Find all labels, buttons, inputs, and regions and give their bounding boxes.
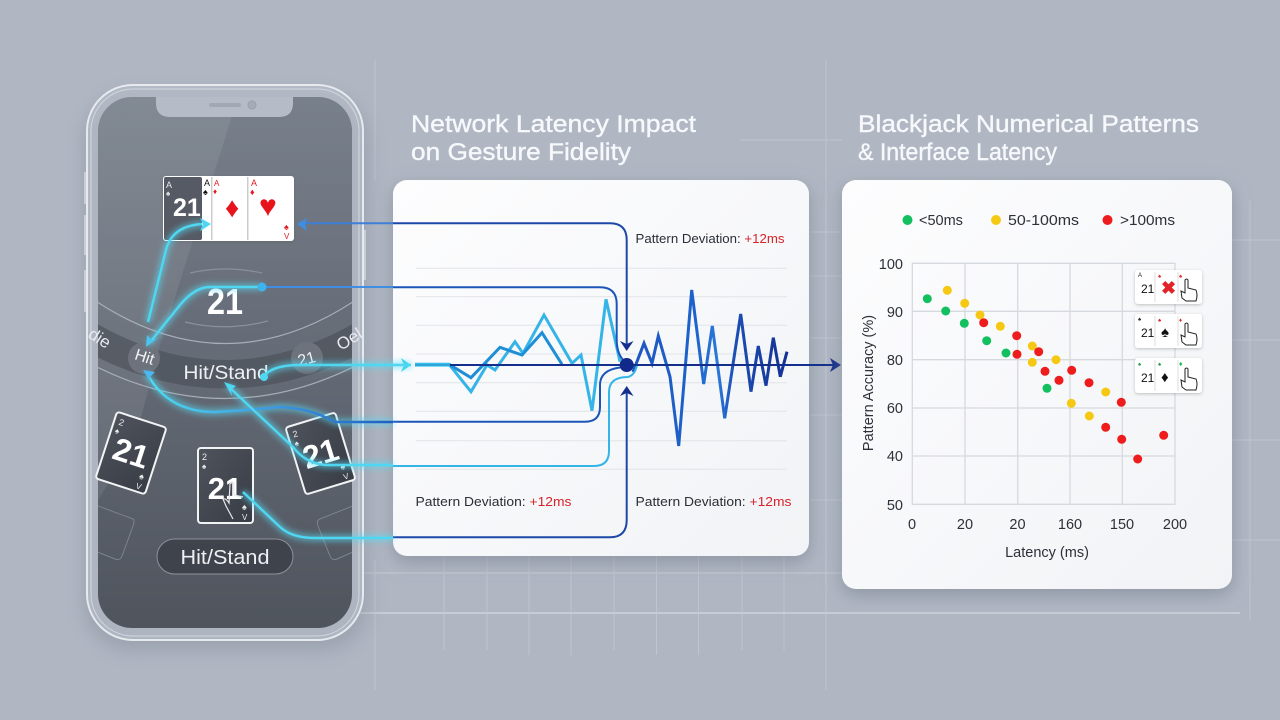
title: network latency impact [411, 111, 696, 166]
right tilted card: V [342, 471, 351, 482]
x axis labels: 150 [1110, 517, 1134, 533]
band label: Oel: Oel [333, 324, 366, 354]
top card fan: ♠ [284, 222, 289, 232]
x axis labels [908, 517, 1187, 533]
center card with hand: V [242, 513, 248, 522]
x axis labels: 0 [908, 517, 916, 533]
21 button: 21 [296, 349, 318, 370]
trace: center card [243, 492, 393, 538]
trace glow [146, 224, 411, 538]
hit button: Hit [132, 347, 157, 369]
trace: hit [149, 377, 393, 422]
y axis labels [879, 257, 903, 514]
connector lines to hub [393, 223, 637, 537]
top card fan: 21 [173, 194, 201, 222]
score dot [258, 282, 266, 292]
points: over 100ms [979, 318, 1168, 464]
top card fan: ♦ [213, 187, 217, 196]
x axis labels: 20 [957, 517, 973, 533]
annotation: left deviation: Pattern Deviation: +12ms [416, 494, 572, 509]
plot grid [912, 263, 1175, 504]
points: 50 to 100ms [943, 286, 1110, 420]
trace: stand [230, 388, 393, 465]
mini card: success gesture: 21 [1141, 371, 1155, 385]
left tilted card: 21 [109, 430, 153, 476]
center card with hand: 2 [202, 452, 207, 462]
mini card: success gesture: ♠ [1138, 362, 1142, 368]
hit/stand pill button [157, 539, 293, 574]
x axis labels: 160 [1058, 517, 1082, 533]
arrowhead: fan [200, 218, 211, 231]
legend: <50ms [919, 213, 963, 229]
trace: card fan [148, 224, 202, 322]
output waveform [633, 290, 787, 446]
top card fan: ♠ [166, 189, 171, 198]
arrowhead: hit upper [146, 335, 158, 347]
center card with hand [198, 448, 253, 523]
top card fan: ♠ [203, 187, 208, 197]
legend: 50-100ms [1008, 213, 1079, 229]
arrowhead: stand dot [260, 373, 268, 381]
arrowhead: blue to card [297, 218, 307, 231]
x axis labels: 20 [1009, 517, 1026, 533]
input waveform [415, 299, 620, 411]
connector: hit/stand [393, 365, 637, 466]
center card with hand: ♠ [242, 502, 247, 512]
arrowhead: down [620, 341, 634, 351]
right tilted card [285, 412, 356, 495]
right tilted card: ♠ [339, 461, 347, 472]
mini card: failed gesture: ♠ [1179, 274, 1183, 280]
hub node [620, 358, 634, 372]
mini card: spade gesture: ♠ [1158, 318, 1162, 324]
title: blackjack numerical patterns [858, 111, 1199, 166]
title: network latency impact: Network Latency Impact [411, 111, 696, 138]
x axis title: Latency (ms) [1005, 545, 1089, 561]
curved control band [98, 302, 352, 400]
trace: hit/stand [266, 365, 411, 374]
points: under 50ms [923, 294, 1052, 393]
left tilted card: 2 [118, 417, 125, 428]
top card fan: ♦ [225, 192, 239, 223]
y axis labels: 100 [879, 257, 903, 273]
hit button [128, 342, 160, 374]
connector: hit [393, 367, 626, 422]
top card fan: A [251, 178, 257, 188]
y axis labels: 80 [887, 353, 903, 369]
top card fan: ♥ [259, 190, 277, 223]
title: blackjack numerical patterns: Blackjack Numerical Patterns [858, 111, 1199, 138]
y axis title: Pattern Accuracy (%) [861, 315, 877, 451]
trace: card blue link [300, 222, 393, 224]
mini card: failed gesture: A [1138, 273, 1142, 279]
connector: center card [393, 390, 627, 537]
arrowhead: hit lower [143, 370, 155, 383]
panel: scatter chart [842, 180, 1232, 589]
mini card: success gesture: ♦ [1161, 369, 1169, 386]
arrowhead: up [620, 386, 634, 396]
top card fan: V [284, 232, 290, 241]
left tilted card: ♠ [138, 471, 146, 482]
title: blackjack numerical patterns: & Interface Latency [858, 139, 1058, 166]
right tilted card: 2 [291, 429, 299, 440]
top card fan: ♦ [250, 187, 255, 197]
y axis labels: 60 [887, 401, 903, 417]
mini card: success gesture [1135, 358, 1202, 393]
panel: network latency chart [393, 180, 809, 556]
annotation: right deviation: Pattern Deviation: +12ms [636, 494, 792, 509]
phone mockup [85, 85, 366, 640]
connector: card fan [393, 223, 627, 345]
mini card: failed gesture: 21 [1141, 282, 1155, 296]
title: network latency impact: on Gesture Fidelity [411, 139, 632, 166]
top card fan [163, 176, 294, 241]
mini card: failed gesture: ✖ [1161, 278, 1176, 298]
center card with hand: ♠ [202, 462, 207, 471]
21 button [291, 342, 323, 374]
mini card: spade gesture: ♠ [1138, 317, 1142, 323]
mini card: success gesture: ♠ [1158, 362, 1162, 368]
center score: 21 [207, 281, 243, 322]
mini card: success gesture: ♦ [1179, 361, 1183, 368]
timeline axis [415, 358, 841, 372]
y axis labels: 90 [887, 305, 903, 321]
arrowhead: stand [224, 382, 236, 396]
y axis labels: 50 [887, 498, 903, 514]
band label: hit/stand: Hit/Stand [184, 363, 268, 384]
y axis labels: 40 [887, 449, 903, 465]
top card fan: A [214, 179, 220, 188]
hit/stand pill button: Hit/Stand [180, 547, 270, 569]
top card fan: A [166, 180, 172, 190]
mini card: failed gesture [1135, 270, 1202, 304]
center card with hand: 21 [208, 471, 242, 506]
left tilted card: ♠ [114, 426, 121, 436]
connector: center score [393, 287, 626, 363]
trace: center score [151, 287, 262, 341]
phone screen [87, 97, 363, 628]
top card fan: A [204, 178, 210, 188]
mini card: spade gesture: 21 [1141, 326, 1155, 340]
band label: die: die [85, 324, 114, 352]
mini card: spade gesture [1135, 314, 1202, 348]
legend [902, 213, 1175, 229]
right tilted card: 21 [298, 431, 343, 476]
left tilted card: V [135, 481, 143, 492]
gesture traces on phone [146, 223, 411, 538]
right tilted card: ♠ [293, 438, 301, 448]
annotation: top deviation: Pattern Deviation: +12ms [636, 231, 785, 246]
phone notch [156, 97, 293, 117]
arrowhead: input [401, 358, 411, 372]
phone frame [85, 85, 365, 640]
mini card: spade gesture: ♦ [1179, 318, 1182, 324]
x axis labels: 200 [1163, 517, 1187, 533]
mini card: spade gesture: ♠ [1161, 324, 1169, 341]
legend: >100ms [1120, 213, 1175, 229]
left tilted card [95, 412, 167, 494]
mini card: failed gesture: ♠ [1158, 274, 1162, 280]
